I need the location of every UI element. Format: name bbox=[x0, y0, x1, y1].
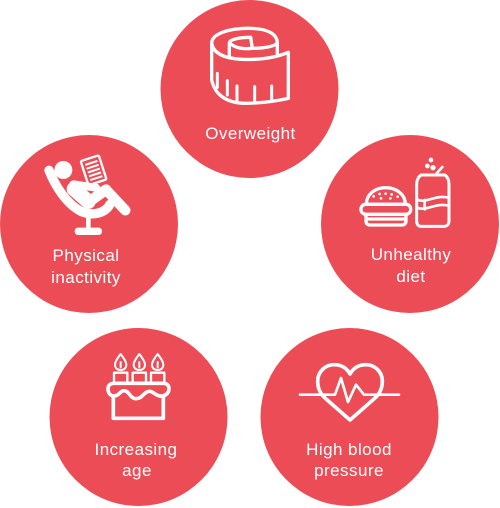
label: Unhealthy diet bbox=[371, 245, 451, 286]
can bbox=[417, 175, 449, 226]
label: Unhealthy diet: diet bbox=[396, 267, 426, 286]
label: Increasing age: Increasing bbox=[95, 440, 177, 459]
label: Physical inactivity: Physical bbox=[53, 246, 119, 265]
label: Physical inactivity bbox=[51, 246, 121, 287]
label: Physical inactivity: inactivity bbox=[51, 268, 121, 287]
icon: measuring tape bbox=[212, 28, 288, 103]
icon: burger and soda can bbox=[361, 158, 449, 226]
icon: heart with pulse line bbox=[300, 365, 399, 420]
icon: person reclining in chair bbox=[49, 155, 125, 235]
burger bbox=[366, 188, 405, 204]
label: Increasing age: age bbox=[122, 461, 152, 480]
label: High blood pressure bbox=[306, 440, 392, 480]
book bbox=[81, 155, 107, 185]
label: High blood pressure: pressure bbox=[314, 461, 384, 480]
label: Unhealthy diet: Unhealthy bbox=[371, 245, 451, 264]
panel: unhealthy diet bbox=[321, 135, 499, 313]
label: Overweight: Overweight bbox=[205, 124, 296, 143]
panel: high blood pressure bbox=[260, 328, 438, 506]
label: High blood pressure: High blood bbox=[306, 440, 392, 459]
label: Increasing age bbox=[95, 440, 177, 480]
panel: overweight bbox=[160, 0, 338, 178]
icon: birthday cake bbox=[108, 354, 169, 418]
panel: physical inactivity bbox=[0, 135, 178, 313]
panel: increasing age bbox=[50, 328, 228, 506]
